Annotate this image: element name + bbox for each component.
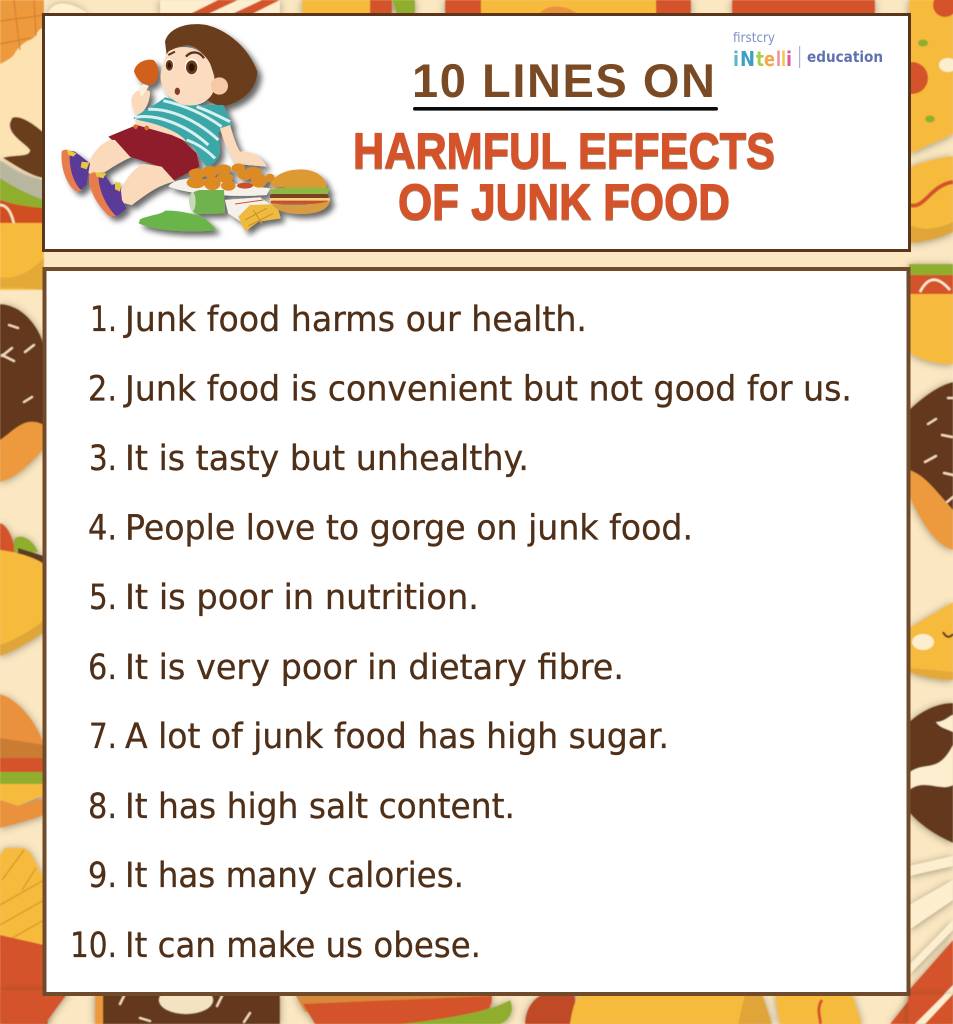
line 5: It is poor in nutrition. — [125, 578, 479, 618]
line 3: 3. — [89, 439, 117, 479]
line 4: 4. — [88, 508, 117, 548]
logo: firstcry intelli education: l — [776, 47, 781, 71]
line 6: It is very poor in dietary fibre. — [125, 648, 624, 688]
logo: firstcry intelli education: N — [740, 47, 755, 71]
food: burger left — [0, 694, 44, 828]
illustration: boy eating junk food — [61, 24, 330, 231]
line 8: It has high salt content. — [125, 787, 515, 827]
panel: list of ten lines — [44, 269, 908, 994]
line 7: 7. — [89, 717, 117, 757]
subtitle: of junk food: OF JUNK FOOD — [398, 174, 730, 230]
logo: firstcry intelli education: e — [764, 47, 775, 71]
food: strip along the top — [48, 0, 875, 14]
food: french fries left — [0, 848, 48, 1024]
logo: firstcry intelli education: t — [756, 47, 764, 71]
line 5: 5. — [89, 578, 117, 618]
food: stripes and fries right — [890, 856, 953, 1024]
line 9: It has many calories. — [125, 856, 464, 896]
panel: header — [44, 14, 910, 250]
food: taco left — [0, 523, 44, 656]
line 1: Junk food harms our health. — [123, 300, 587, 340]
food: waffle cone and cream top-left — [0, 0, 44, 175]
line 7: A lot of junk food has high sugar. — [125, 717, 669, 757]
logo: firstcry intelli education: i — [786, 47, 792, 71]
line 10: It can make us obese. — [125, 926, 481, 966]
line 8: 8. — [88, 787, 117, 827]
line 1: 1. — [90, 300, 117, 340]
line 9: 9. — [88, 856, 117, 896]
line 10: 10. — [70, 926, 117, 966]
line 3: It is tasty but unhealthy. — [125, 439, 529, 479]
line 6: 6. — [88, 648, 117, 688]
food: strip along the bottom — [0, 986, 953, 1024]
food: chocolate donut left — [0, 304, 44, 482]
food: chocolate swirl right — [909, 703, 953, 843]
line 2: Junk food is convenient but not good for us. — [123, 370, 852, 410]
boy figure — [61, 24, 267, 217]
title: 10 lines on: 10 LINES ON — [412, 54, 715, 107]
line 4: People love to gorge on junk food. — [125, 508, 693, 548]
food: pizza slice right — [909, 602, 953, 680]
logo: firstcry intelli education: education — [807, 48, 883, 66]
food: chocolate donut right — [909, 382, 953, 550]
logo: firstcry intelli education: i — [733, 47, 739, 71]
food: chocolate drizzle and hot dog left — [0, 117, 44, 290]
line 2: 2. — [88, 370, 117, 410]
logo: firstcry intelli education: l — [781, 47, 786, 71]
logo: firstcry intelli education — [733, 31, 883, 71]
food: hot dog right — [909, 264, 953, 364]
food pile — [139, 163, 330, 231]
food: pizza slices top-right — [896, 0, 953, 243]
subtitle: harmful effects: HARMFUL EFFECTS — [353, 123, 775, 179]
logo: firstcry intelli education: firstcry — [733, 31, 775, 46]
title underline — [413, 107, 718, 111]
